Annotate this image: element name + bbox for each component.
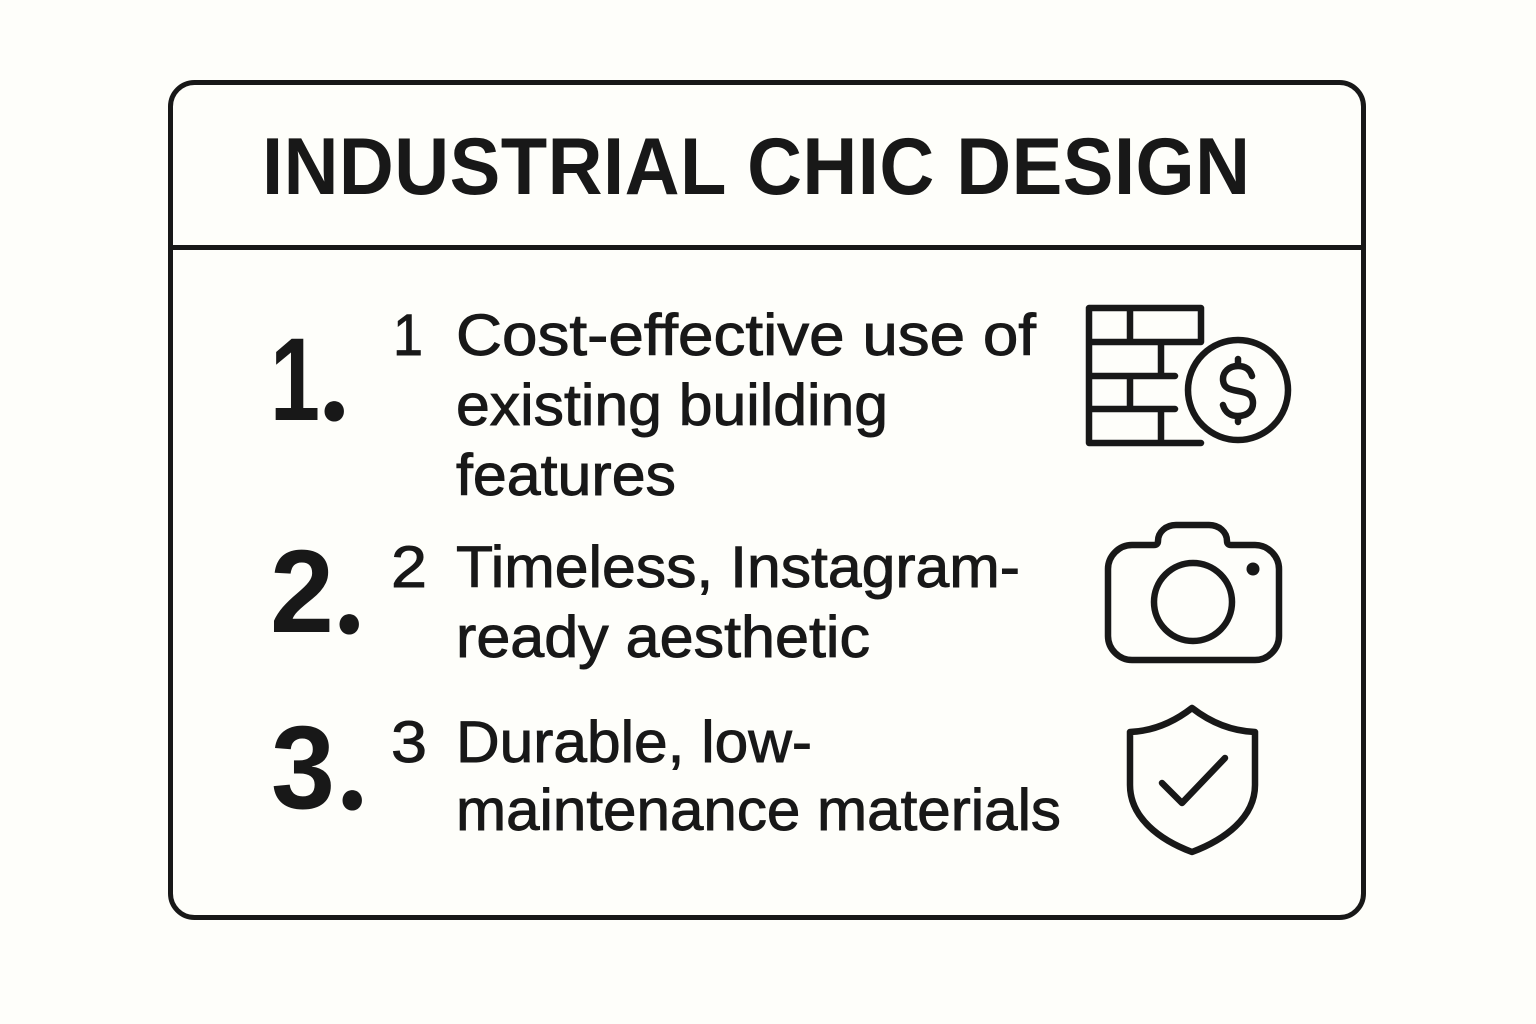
list item 1 [270, 297, 1288, 508]
panel: main frame [170, 82, 1364, 918]
title: INDUSTRIAL CHIC DESIGN [262, 121, 1250, 211]
icon: shield with check mark [1130, 708, 1255, 852]
small number 1: 1 [393, 303, 423, 368]
item 2 text: ready aesthetic [456, 605, 870, 670]
small number 3: 3 [391, 710, 427, 775]
small number 2: 2 [391, 535, 427, 600]
large number 2 [270, 510, 366, 664]
item 1 text: existing building [456, 373, 888, 438]
item 1 text: features [456, 443, 676, 508]
item 1 text [456, 303, 1037, 508]
item 3 text: Durable, low- [456, 710, 812, 775]
item 1 text: Cost-effective use of [456, 303, 1037, 368]
large number 1: . [317, 297, 351, 451]
large number 3: 3 [271, 702, 335, 834]
item 3 text: maintenance materials [456, 778, 1061, 843]
item 3 text [456, 710, 1061, 843]
large number 1 [270, 297, 351, 451]
large number 2: . [332, 510, 366, 664]
large number 1: 1 [270, 314, 320, 446]
item 2 text [456, 535, 1020, 670]
icon: brick wall with dollar coin [1089, 308, 1288, 443]
item 2 text: Timeless, Instagram- [456, 535, 1020, 600]
list item 3 [271, 686, 1255, 852]
icon: camera [1108, 525, 1279, 660]
large number 3: . [335, 686, 369, 840]
list item 2 [270, 510, 1279, 670]
large number 3 [271, 686, 369, 840]
large number 2: 2 [270, 526, 334, 658]
